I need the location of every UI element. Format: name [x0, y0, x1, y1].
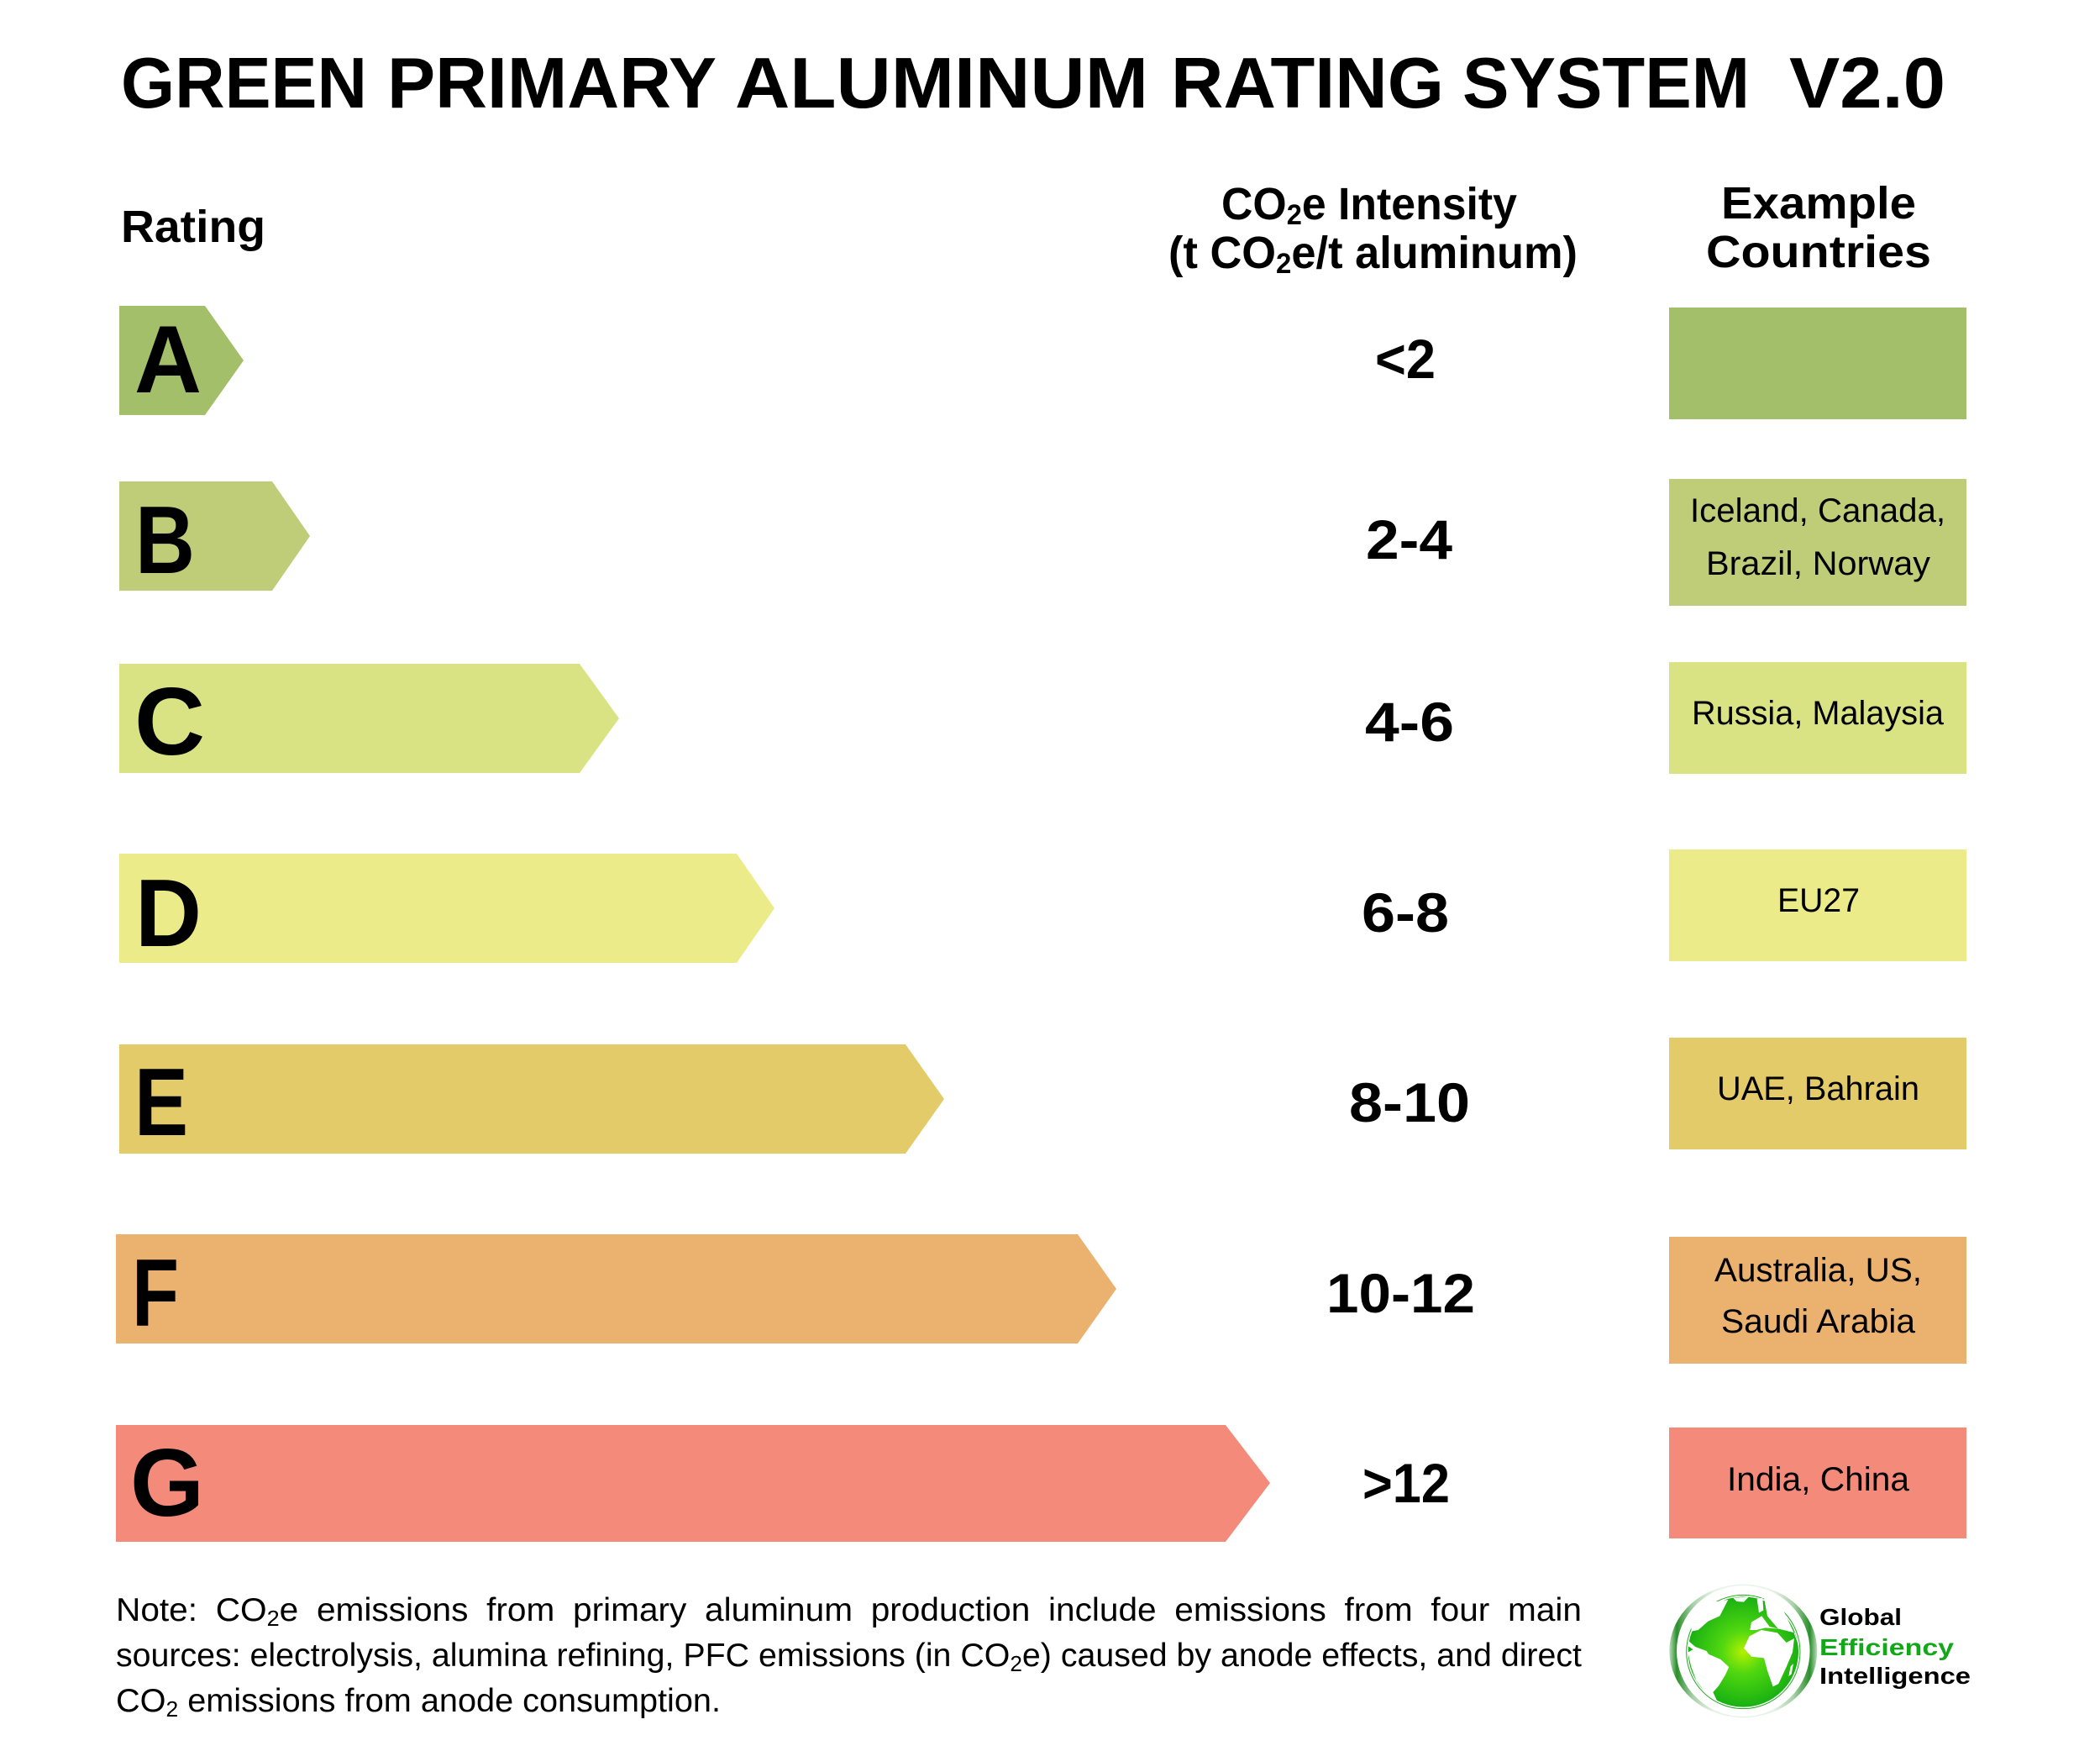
- heading: CO2e intensity: 2: [1276, 248, 1291, 280]
- countries box D: [1669, 849, 1966, 961]
- intensity G: >12: [1362, 1452, 1450, 1514]
- logo text: [1819, 1604, 1971, 1689]
- heading: example countries: Example: [1721, 178, 1916, 229]
- intensity B: 2-4: [1366, 508, 1452, 571]
- rating row E: [119, 1038, 1966, 1156]
- rating row F: [116, 1234, 1966, 1364]
- heading: example countries: [1706, 178, 1931, 277]
- countries text E: UAE, Bahrain: [1717, 1070, 1919, 1107]
- letter B: B: [135, 487, 195, 594]
- icon: green globe: [1669, 1585, 1817, 1717]
- rating row G: [116, 1425, 1966, 1542]
- intensity C: 4-6: [1365, 691, 1454, 753]
- letter C: C: [134, 669, 205, 776]
- countries text C: Russia, Malaysia: [1692, 695, 1945, 732]
- note text: Note: CO: [116, 1592, 261, 1628]
- note text: sources: electrolysis, alumina refining, PFC emissions (in CO: [116, 1638, 1003, 1674]
- arrow bar C: [119, 664, 619, 773]
- note text: 2: [1010, 1651, 1022, 1676]
- countries box C: [1669, 662, 1966, 774]
- title: GREEN: [121, 44, 367, 124]
- heading: rating: Rating: [121, 202, 265, 252]
- heading: example countries: Countries: [1706, 227, 1931, 277]
- countries text F: Saudi Arabia: [1721, 1303, 1916, 1340]
- arrow bar D: [119, 854, 774, 963]
- countries text B: [1690, 492, 1945, 582]
- countries box F: [1669, 1237, 1966, 1364]
- intensity A: <2: [1375, 328, 1436, 390]
- logo text: Efficiency: [1819, 1634, 1955, 1660]
- countries text B: Iceland, Canada,: [1690, 492, 1945, 529]
- heading: CO2e intensity: e Intensity: [1302, 179, 1517, 229]
- intensity E: 8-10: [1349, 1071, 1470, 1133]
- letter A: A: [134, 307, 202, 413]
- title: ALUMINUM: [735, 44, 1148, 124]
- arrow bar B: [119, 481, 310, 591]
- countries box E: [1669, 1038, 1966, 1149]
- arrow bar E: [119, 1044, 944, 1154]
- intensity F: 10-12: [1326, 1262, 1475, 1324]
- countries box B: [1669, 479, 1966, 606]
- intensity D: 6-8: [1362, 881, 1449, 944]
- logo text: Global: [1819, 1604, 1902, 1630]
- arrow bar F: [116, 1234, 1116, 1343]
- rating row D: [119, 849, 1966, 967]
- note text: e emissions from primary aluminum production include emissions from four main: [280, 1592, 1582, 1628]
- heading: CO2e intensity: e/t aluminum): [1291, 228, 1578, 278]
- logo: Global Efficiency Intelligence: [1669, 1585, 1971, 1717]
- title: PRIMARY: [387, 44, 717, 124]
- letter E: E: [134, 1049, 188, 1156]
- countries text B: Brazil, Norway: [1706, 545, 1930, 582]
- logo text: Intelligence: [1819, 1663, 1971, 1689]
- heading: CO2e intensity: 2: [1287, 199, 1302, 231]
- countries text F: [1714, 1252, 1922, 1340]
- rating row C: [119, 662, 1966, 776]
- note text: emissions from anode consumption.: [178, 1683, 721, 1719]
- note text: e) caused by anode effects, and direct: [1022, 1638, 1582, 1674]
- title: [121, 44, 1945, 124]
- countries text F: Australia, US,: [1714, 1252, 1922, 1289]
- note text: 2: [267, 1606, 280, 1631]
- title: V2.0: [1789, 44, 1945, 124]
- countries text D: EU27: [1777, 882, 1860, 919]
- countries text G: India, China: [1727, 1461, 1910, 1498]
- arrow bar A: [119, 306, 244, 415]
- letter G: G: [130, 1430, 204, 1537]
- rating row A: [119, 306, 1966, 419]
- note text: CO: [116, 1683, 165, 1719]
- letter F: F: [132, 1240, 179, 1347]
- note text: 2: [165, 1696, 178, 1722]
- heading: CO2e intensity: [1168, 179, 1578, 280]
- arrow bar G: [116, 1425, 1270, 1542]
- rating row B: [119, 479, 1966, 606]
- countries box G: [1669, 1428, 1966, 1538]
- countries box A: [1669, 308, 1966, 419]
- letter D: D: [135, 860, 202, 967]
- heading: CO2e intensity: (t CO: [1168, 228, 1279, 278]
- heading: CO2e intensity: CO: [1221, 179, 1289, 229]
- note text: [116, 1592, 1582, 1722]
- title: SYSTEM: [1462, 44, 1750, 124]
- title: RATING: [1171, 44, 1444, 124]
